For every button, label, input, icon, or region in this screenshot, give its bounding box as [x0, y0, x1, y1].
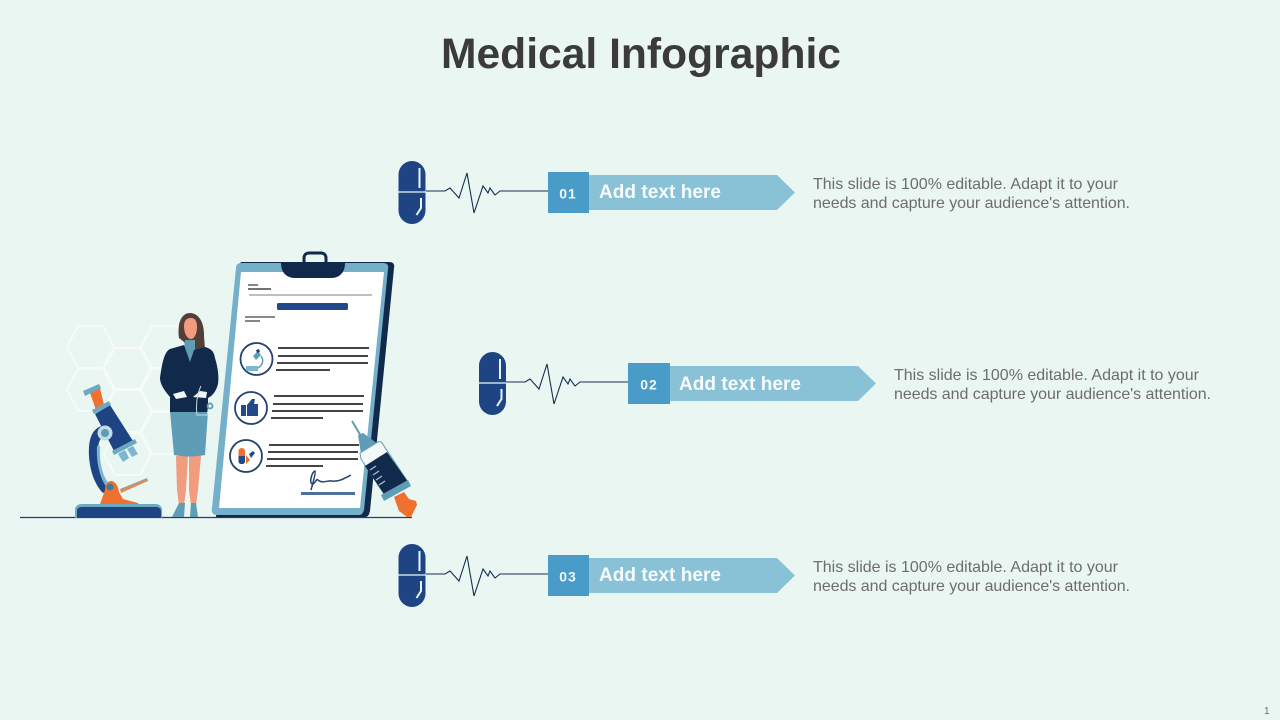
- page number: 1: [1264, 706, 1270, 717]
- item 03: [398, 544, 1130, 607]
- description: needs and capture your audience's attention.: [813, 195, 1130, 212]
- item 02: Add text here: [679, 374, 801, 395]
- clip handle: [304, 253, 326, 264]
- heartbeat line: [426, 173, 548, 213]
- clip: [281, 263, 345, 278]
- icon: clipboard: [212, 253, 394, 517]
- illustration: medical scene: [20, 253, 417, 518]
- icon: doctor woman: [160, 313, 218, 517]
- icon: pill: [398, 544, 426, 607]
- ground line: [20, 516, 412, 518]
- title: Medical Infographic: [441, 30, 841, 78]
- icon: pill: [478, 352, 506, 415]
- number box: [548, 172, 589, 213]
- arrow banner: [670, 366, 876, 401]
- description: This slide is 100% editable. Adapt it to your: [813, 176, 1119, 193]
- row 2: thumbs up badge and lines: [235, 392, 364, 424]
- item 01: 01: [559, 186, 577, 202]
- arrow banner: [589, 175, 795, 210]
- description: needs and capture your audience's attention.: [894, 386, 1211, 403]
- item 02: 02: [640, 376, 658, 392]
- arrow banner: [589, 558, 795, 593]
- item 03: Add text here: [599, 565, 721, 586]
- paper: [219, 272, 384, 508]
- hexagon background pattern: [67, 326, 188, 475]
- item 02: [478, 352, 1211, 415]
- number box: [628, 363, 670, 404]
- signature: [301, 471, 355, 495]
- clipboard board: [216, 262, 394, 517]
- icon: microscope: [75, 384, 162, 518]
- description: This slide is 100% editable. Adapt it to your: [813, 559, 1119, 576]
- item 03: 03: [559, 568, 577, 584]
- item 01: [398, 161, 1130, 224]
- heartbeat line: [506, 364, 628, 404]
- heartbeat line: [426, 556, 548, 596]
- icon: pill: [398, 161, 426, 224]
- item 01: Add text here: [599, 182, 721, 203]
- number box: [548, 555, 589, 596]
- description: This slide is 100% editable. Adapt it to your: [894, 367, 1200, 384]
- row 1: microscope badge and lines: [240, 343, 369, 375]
- icon: syringe: [352, 421, 417, 517]
- row 3: pills badge and lines: [230, 440, 359, 472]
- description: needs and capture your audience's attention.: [813, 578, 1130, 595]
- paper header: [245, 285, 372, 321]
